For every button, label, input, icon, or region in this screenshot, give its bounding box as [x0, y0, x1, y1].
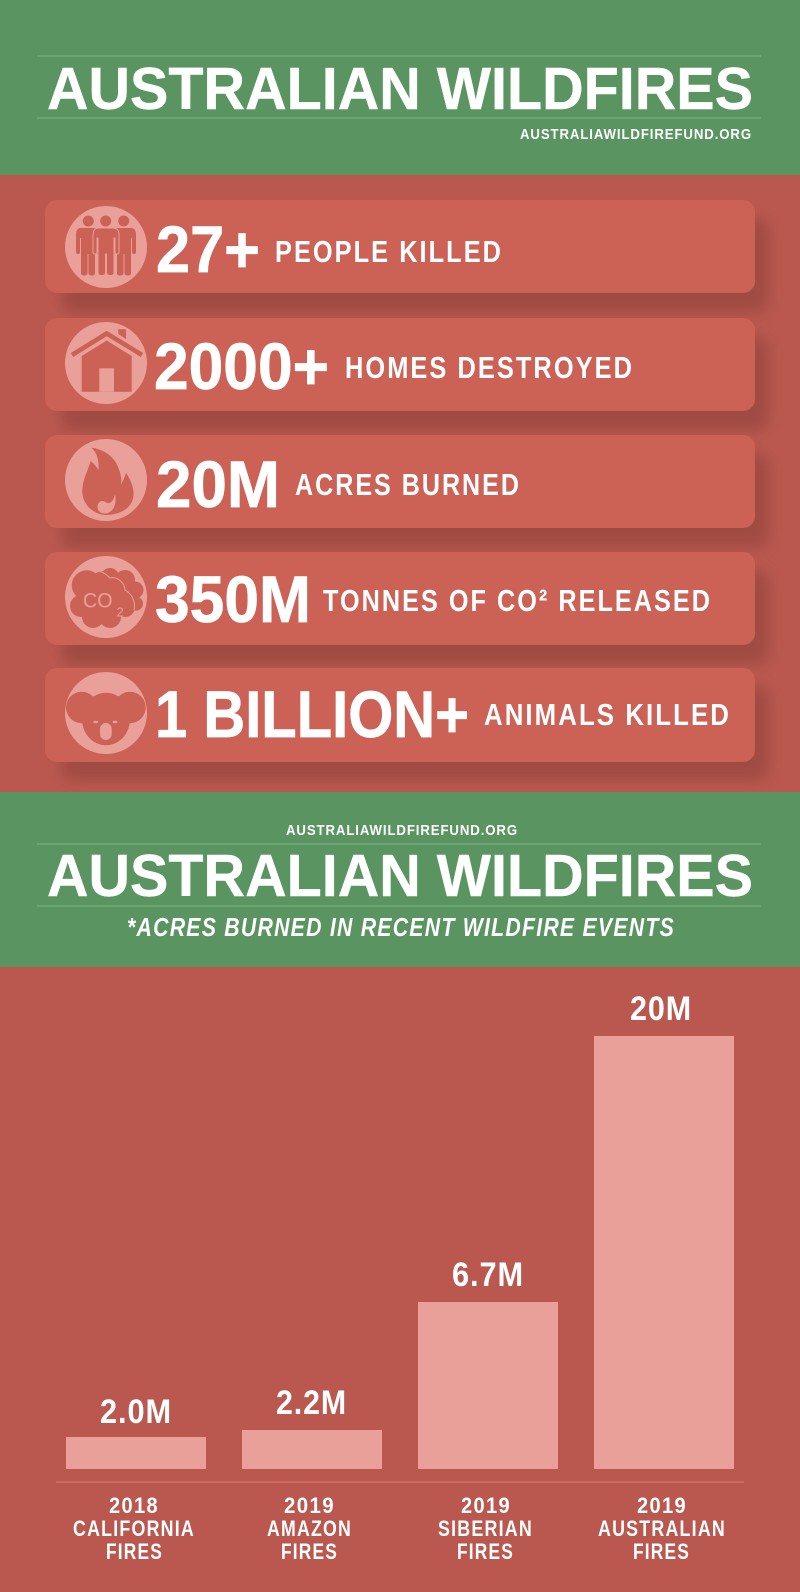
stat card: people killed	[45, 200, 755, 293]
bar: 2019 amazon fires	[242, 1384, 382, 1564]
panel: top header	[0, 0, 800, 175]
bar: 2019 australian fires: 2019	[637, 1493, 687, 1518]
panel: second header	[0, 792, 800, 967]
title: AUSTRALIAN WILDFIRES	[47, 843, 753, 909]
bar: 2019 australian fires	[594, 990, 734, 1564]
bar: 2019 siberian fires: 6.7M	[452, 1256, 524, 1294]
bar: 2018 california fires	[66, 1393, 206, 1564]
number: 1 billion+: 1 BILLION+	[155, 677, 469, 751]
icon: co2 cloud	[65, 556, 147, 638]
bar: 2019 australian fires: 20M	[630, 990, 692, 1028]
bar: 2018 california fires: FIRES	[106, 1539, 163, 1564]
stat card: homes destroyed	[45, 318, 755, 411]
number: 27+: 27+	[156, 212, 260, 286]
bar: 2019 amazon fires: 2019	[284, 1493, 335, 1518]
bar: 2019 australian fires: AUSTRALIAN	[598, 1516, 726, 1541]
bar: 2018 california fires: CALIFORNIA	[73, 1516, 195, 1541]
number: 20M: 20M	[156, 447, 280, 521]
bar: 2019 amazon fires: FIRES	[281, 1539, 338, 1564]
bar: 2019 amazon fires: 2.2M	[276, 1384, 347, 1422]
icon: koala	[65, 672, 147, 754]
bar: 2019 australian fires: FIRES	[633, 1539, 690, 1564]
title: AUSTRALIAN WILDFIRES	[47, 56, 753, 122]
bar chart: acres burned	[0, 967, 800, 1592]
bar: 2019 amazon fires: AMAZON	[267, 1516, 352, 1541]
icon: house	[65, 322, 147, 404]
label: acres burned: ACRES BURNED	[295, 467, 521, 502]
icon: co2 cloud: CO	[83, 590, 112, 613]
icon: flame	[65, 439, 147, 521]
subtitle: *ACRES BURNED IN RECENT WILDFIRE EVENTS	[127, 912, 675, 942]
bar: 2018 california fires: 2.0M	[100, 1393, 172, 1431]
stat card: animals killed	[45, 668, 755, 762]
number: 2000+: 2000+	[154, 329, 329, 403]
panel: statistics	[0, 175, 800, 792]
icon: people	[65, 206, 147, 288]
bar: 2019 siberian fires	[418, 1256, 558, 1564]
stat card: acres burned	[45, 435, 755, 528]
bar: 2019 siberian fires: 2019	[461, 1493, 511, 1518]
website url: AUSTRALIAWILDFIREFUND.ORG	[286, 822, 518, 839]
bar: 2018 california fires: 2018	[109, 1493, 159, 1518]
icon: co2 cloud: 2	[116, 604, 124, 619]
label: homes destroyed: HOMES DESTROYED	[345, 350, 634, 385]
bar: 2019 siberian fires: FIRES	[457, 1539, 514, 1564]
bar: 2019 siberian fires: SIBERIAN	[438, 1516, 533, 1541]
label: people killed: PEOPLE KILLED	[275, 234, 503, 269]
label: animals killed: ANIMALS KILLED	[484, 697, 731, 732]
website url: AUSTRALIAWILDFIREFUND.ORG	[520, 126, 752, 143]
stat card: co2 released	[45, 552, 755, 645]
label: tonnes of co2 released: TONNES OF CO² RELEASED	[323, 583, 712, 618]
number: 350M: 350M	[155, 562, 311, 636]
